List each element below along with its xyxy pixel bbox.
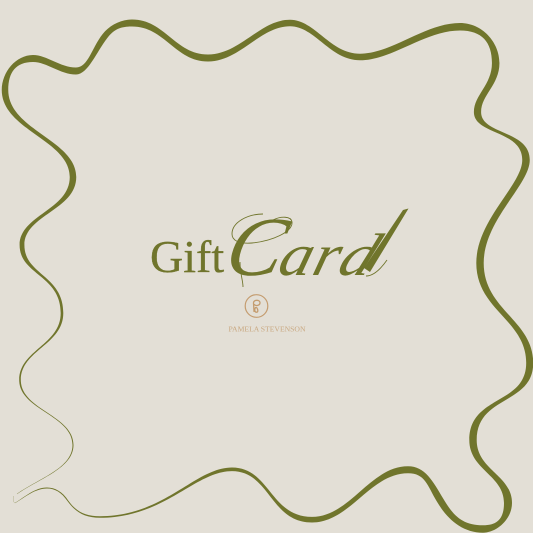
heading: Card: d — [329, 223, 390, 289]
heading: Card: C — [217, 201, 298, 294]
brand name: PAMELA STEVENSON — [228, 324, 306, 334]
heading: Gift: Gift — [150, 231, 224, 282]
logo: monogram badge — [245, 295, 268, 317]
heading: Card: ar — [272, 222, 351, 288]
heading: Card — [217, 201, 408, 294]
